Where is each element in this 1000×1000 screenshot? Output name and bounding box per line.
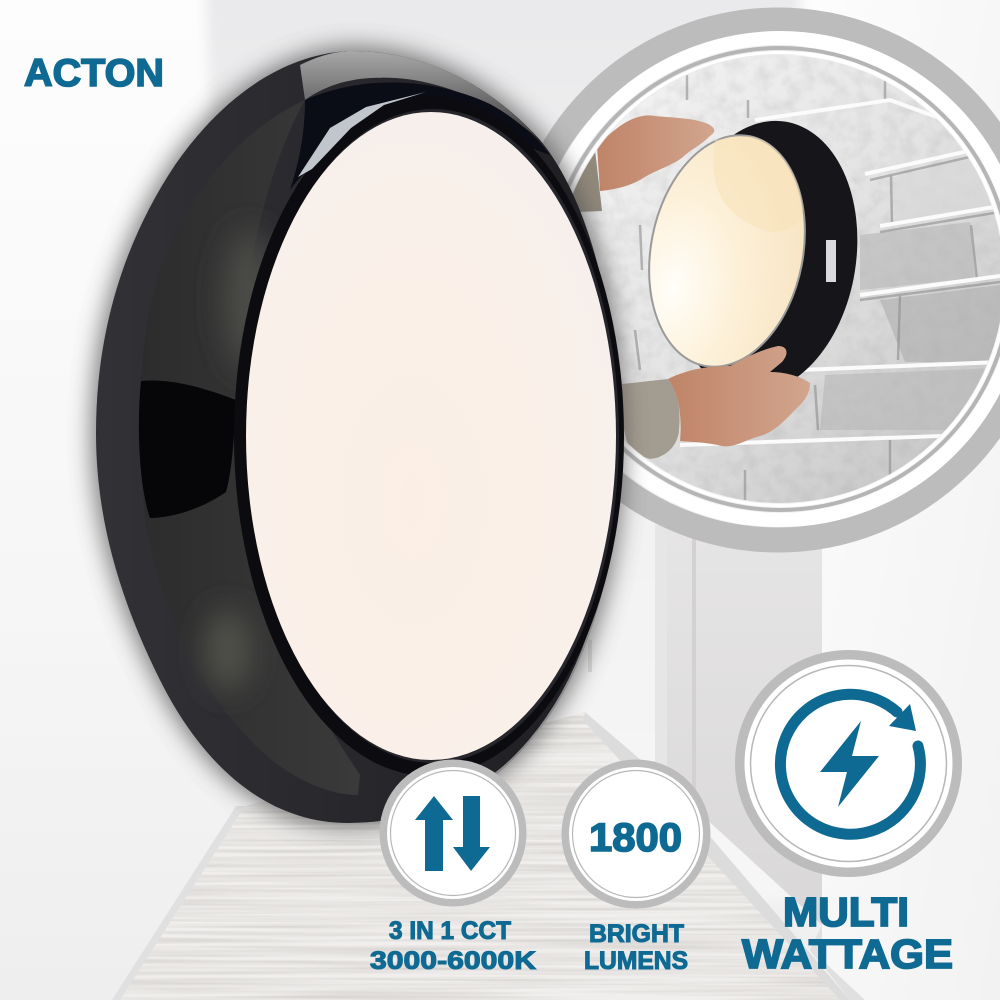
label: 3 in 1 CCT: 3 IN 1 CCT [389, 917, 511, 945]
title: ACTON [24, 52, 164, 95]
photo lamp diffuser [648, 134, 806, 368]
lower sleeve [621, 379, 680, 459]
label: multi wattage: MULTI [783, 889, 909, 935]
black rim [234, 96, 624, 776]
badge: 1800 lumens: 1800 [589, 816, 682, 860]
icon: up and down arrows [415, 796, 490, 871]
inset circle: installation photo [518, 20, 1000, 540]
label: 3 in 1 CCT: 3000-6000K [370, 947, 536, 975]
badge: 3 in 1 CCT [380, 760, 526, 906]
photo lamp body [698, 120, 858, 377]
outer grey ring [518, 20, 1000, 540]
glossy black top [290, 82, 550, 190]
upper sleeve [572, 152, 602, 212]
diffuser [246, 112, 616, 760]
lower edge reflection [440, 470, 619, 810]
dome highlights [208, 230, 275, 690]
label: bright lumens: BRIGHT [589, 920, 684, 948]
lamp body [96, 51, 620, 823]
dome panel [140, 100, 360, 795]
photo: brick wall and hands [550, 50, 1000, 510]
label: 3 in 1 CCT [370, 917, 536, 975]
label: bright lumens: LUMENS [584, 947, 688, 975]
badge: multi wattage [735, 650, 962, 877]
label: multi wattage [742, 889, 953, 977]
icon: cycle arrow with lightning bolt [780, 694, 920, 834]
upper hand [597, 115, 714, 191]
product: round wall light [96, 51, 624, 823]
top sheen [300, 51, 540, 140]
glossy highlight [298, 92, 426, 177]
lower hand [668, 346, 810, 446]
label: multi wattage: WATTAGE [742, 931, 953, 977]
dark reflection [139, 380, 236, 518]
badge: 1800 lumens [562, 760, 710, 908]
label: bright lumens [584, 920, 688, 975]
lamp shadow [96, 51, 620, 823]
